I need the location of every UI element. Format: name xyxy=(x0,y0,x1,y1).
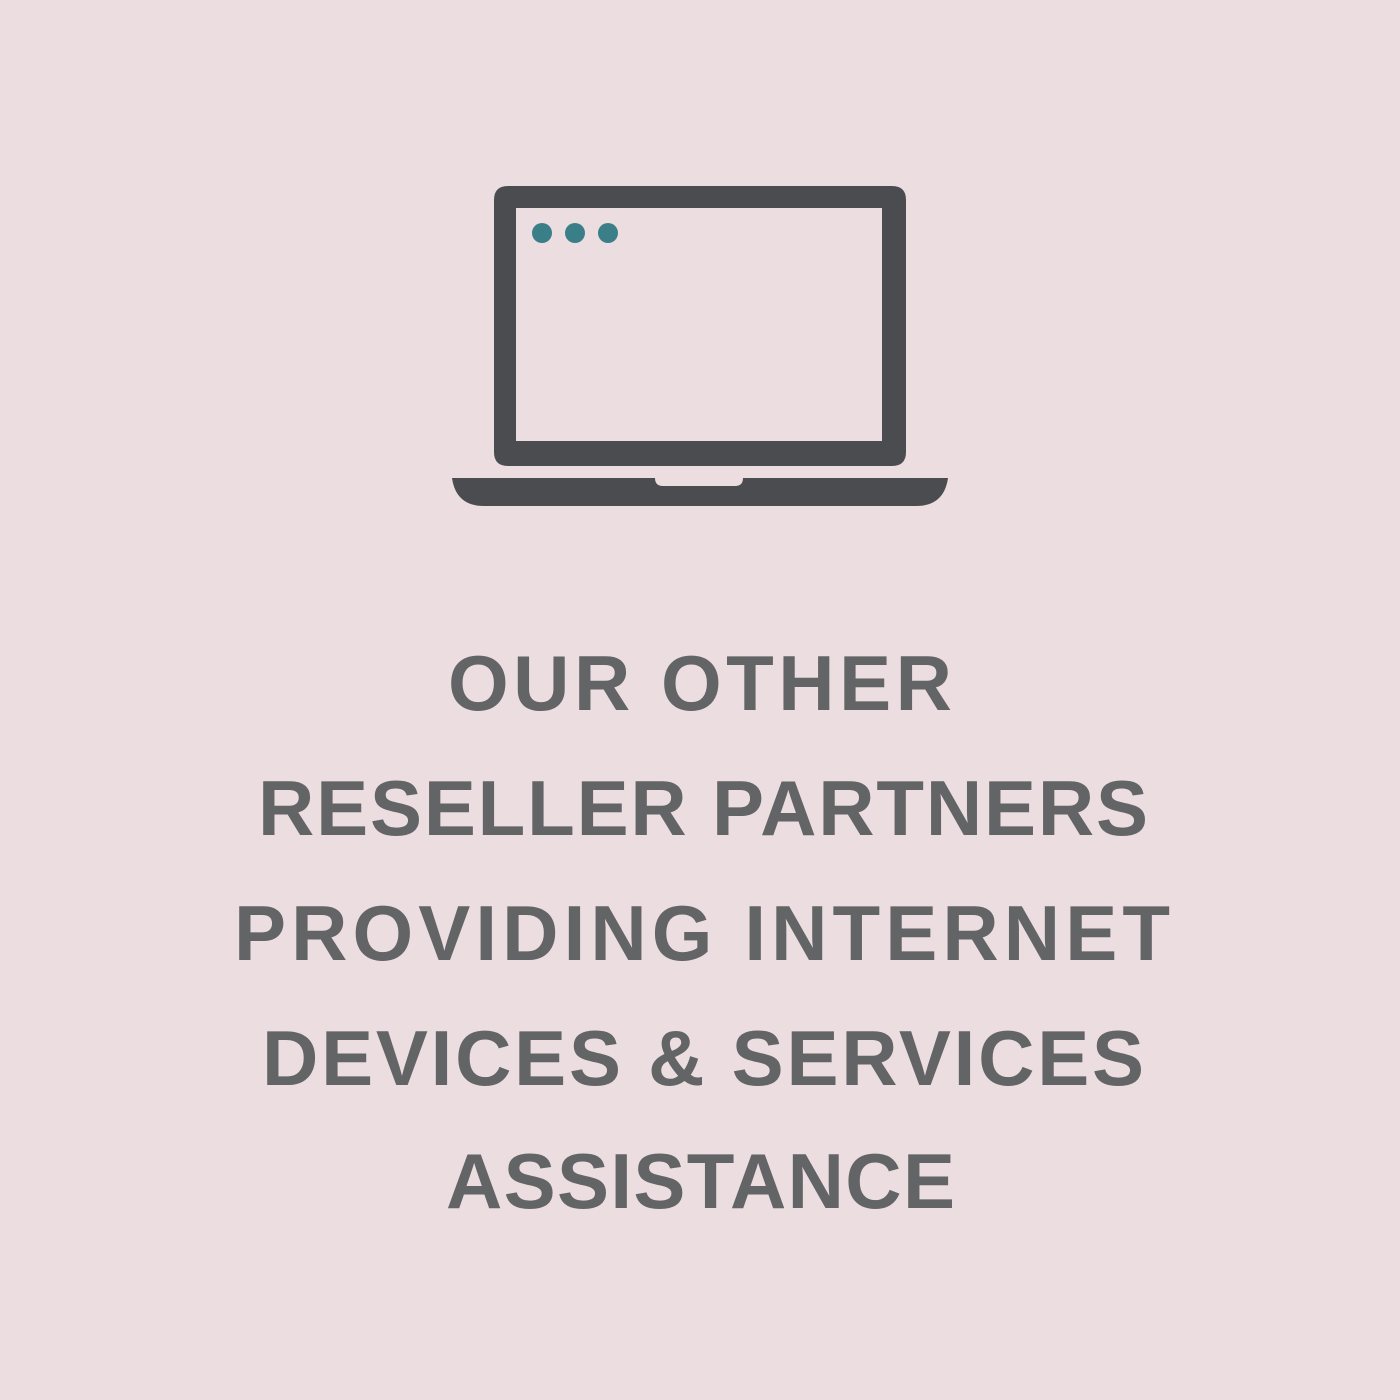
heading text: DEVICES & SERVICES xyxy=(262,1014,1144,1102)
heading text: PROVIDING INTERNET xyxy=(234,889,1170,977)
heading text xyxy=(234,639,1170,1225)
laptop screen xyxy=(494,186,906,466)
laptop base xyxy=(452,478,948,506)
heading text: RESELLER PARTNERS xyxy=(258,764,1148,852)
window dots xyxy=(532,223,618,243)
heading text: ASSISTANCE xyxy=(446,1137,955,1225)
icon: laptop xyxy=(452,186,948,506)
heading text: OUR OTHER xyxy=(448,639,952,727)
